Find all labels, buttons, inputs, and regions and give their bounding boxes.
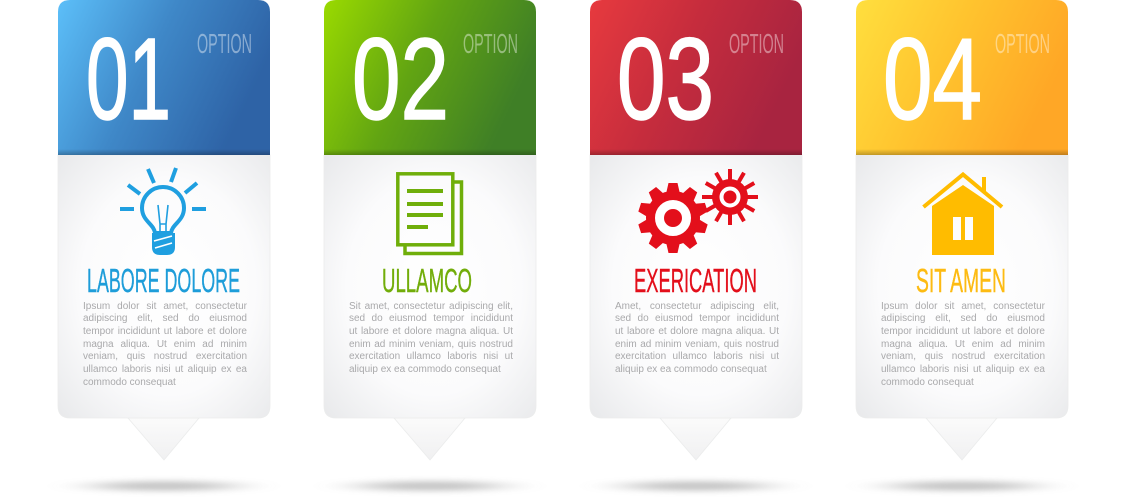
panel: option 03 <box>590 0 802 494</box>
ground shadow <box>624 481 768 491</box>
heading: EXERICATION <box>634 262 757 299</box>
description text: magna aliqua. Ut enim ad minim <box>881 339 1045 350</box>
icon: documents <box>398 174 462 254</box>
description text: exercitation ullamco laboris nisi ut <box>615 351 779 362</box>
description text: aliquip ex ea commodo consequat <box>349 364 501 375</box>
description text: sed do eiusmod tempor incididunt <box>349 313 513 324</box>
description text: veniam, quis nostrud exercitation <box>83 351 247 362</box>
number: 01 <box>86 14 171 144</box>
ground shadow <box>358 481 502 491</box>
option label: OPTION <box>729 28 784 59</box>
description text: tempor incididunt ut labore et dolore <box>881 326 1045 337</box>
description text: adipiscing elit, sed do eiusmod <box>881 313 1045 324</box>
option label: OPTION <box>197 28 252 59</box>
description text: Ipsum dolor sit amet, consectetur <box>83 300 247 312</box>
heading: ULLAMCO <box>382 262 472 299</box>
icon: gears <box>638 159 768 253</box>
description text: ullamco laboris nisi ut aliquip ex ea <box>881 364 1045 375</box>
header band <box>856 0 1068 155</box>
description text <box>83 300 247 388</box>
description text: adipiscing elit, sed do eiusmod <box>83 313 247 324</box>
description text: enim ad minim veniam, quis nostrud <box>349 339 513 350</box>
header band <box>590 0 802 155</box>
header band <box>58 0 270 155</box>
card body with pointer <box>324 155 536 460</box>
large gear <box>638 183 708 253</box>
ground shadow <box>92 481 236 491</box>
description text: exercitation ullamco laboris nisi ut <box>349 351 513 362</box>
description text: commodo consequat <box>83 377 176 388</box>
icon: light bulb <box>120 168 206 255</box>
description text <box>881 300 1045 388</box>
description text: ut labore et dolore magna aliqua. Ut <box>349 326 513 337</box>
header band <box>324 0 536 155</box>
small gear <box>692 159 768 235</box>
number: 03 <box>617 14 714 144</box>
description text: magna aliqua. Ut enim ad minim <box>83 339 247 350</box>
icon: house <box>924 174 1002 255</box>
card body with pointer <box>856 155 1068 460</box>
number: 02 <box>352 14 449 144</box>
heading: LABORE DOLORE <box>87 262 240 299</box>
option label: OPTION <box>463 28 518 59</box>
panel: option 01 <box>58 0 270 494</box>
description text: Sit amet, consectetur adipiscing elit, <box>349 300 513 312</box>
description text: ullamco laboris nisi ut aliquip ex ea <box>83 364 247 375</box>
description text: tempor incididunt ut labore et dolore <box>83 326 247 337</box>
panel: option 02 <box>324 0 536 494</box>
option label: OPTION <box>995 28 1050 59</box>
description text <box>615 300 779 375</box>
description text: Amet, consectetur adipiscing elit, <box>615 300 779 312</box>
number: 04 <box>883 14 982 144</box>
description text: ut labore et dolore magna aliqua. Ut <box>615 326 779 337</box>
ground shadow <box>890 481 1034 491</box>
panel: option 04 <box>856 0 1068 494</box>
description text: veniam, quis nostrud exercitation <box>881 351 1045 362</box>
description text: enim ad minim veniam, quis nostrud <box>615 339 779 350</box>
description text: Ipsum dolor sit amet, consectetur <box>881 300 1045 312</box>
description text: sed do eiusmod tempor incididunt <box>615 313 779 324</box>
description text: commodo consequat <box>881 377 974 388</box>
description text: aliquip ex ea commodo consequat <box>615 364 767 375</box>
heading: SIT AMEN <box>916 262 1006 299</box>
description text <box>349 300 513 375</box>
card body with pointer <box>590 155 802 460</box>
card body with pointer <box>58 155 270 460</box>
